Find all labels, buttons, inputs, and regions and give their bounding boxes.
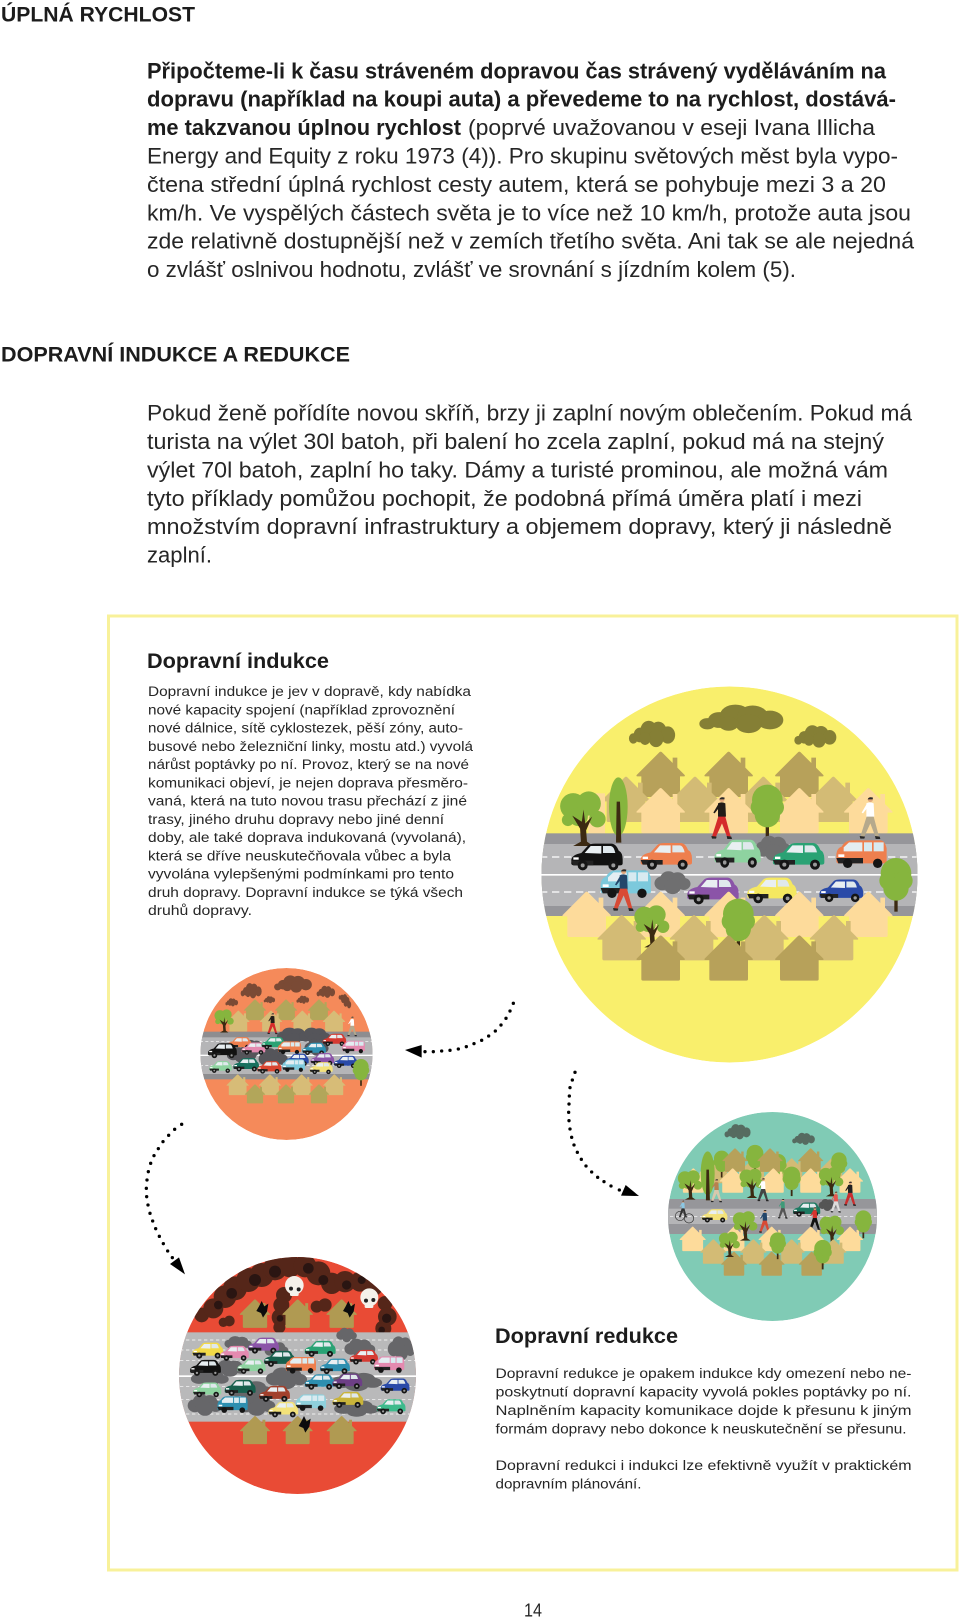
text block: dopravní indukce a redukce: tyto příklady pomůžou pochopit, že podobná přímá úměra platí i mezi (147, 486, 862, 511)
heading: Dopravní indukce a redukce: DOPRAVNÍ INDUKCE A REDUKCE (1, 342, 350, 366)
text block: dopravní indukce a redukce: Pokud ženě pořídíte novou skříň, brzy ji zaplní novým oblečením. Pokud má (147, 401, 913, 426)
text block: dopravní redukce: dopravním plánování. (496, 1476, 642, 1492)
text block: úplná rychlost: o zvlášť oslnivou hodnotu, zvlášť ve srovnání s jízdním kolem (5). (147, 257, 796, 282)
houses below road (240, 1416, 357, 1444)
cars (208, 1034, 365, 1074)
dead birds (256, 1301, 355, 1433)
heading: Dopravní redukce: Dopravní redukce (495, 1324, 678, 1348)
text block: úplná rychlost: (poprvé uvažovanou v eseji Ivana Illicha (468, 115, 876, 140)
houses above road (588, 752, 893, 833)
text block: dopravní indukce: Dopravní indukce je jev v dopravě, kdy nabídka (148, 684, 471, 700)
road (663, 1199, 883, 1234)
text block: úplná rychlost: zde relativně dostupnější než v zemích třetího světa. Ani tak se ale nejedná (147, 229, 915, 254)
clouds (725, 1124, 815, 1145)
trees above road (560, 777, 784, 846)
text block: dopravní indukce: nové kapacity spojení (například zprovoznění (148, 702, 455, 718)
arrow: from yellow to orange circle (405, 1002, 515, 1058)
illustration: orange circle, congested traffic (200, 968, 372, 1140)
text block: dopravní indukce a redukce: turista na výlet 30l batoh, při balení ho zcela zaplní, pokud má na stejný (147, 429, 884, 454)
road (170, 1332, 430, 1422)
text block: úplná rychlost: Připočteme-li k času stráveném dopravou čas strávený vyděláváním na (147, 58, 887, 83)
clouds (629, 705, 836, 748)
text block: dopravní indukce a redukce: výlet 70l batoh, zaplní ho taky. Dámy a turisté prominou, ale možná vám (147, 457, 888, 482)
houses and trees below road (562, 858, 913, 981)
text block: dopravní indukce: vyvolána vylepšenými podmínkami pro tento (148, 866, 454, 882)
text block: dopravní redukce: Dopravní redukci i indukci lze efektivně využít v praktickém (496, 1458, 912, 1474)
heading: Dopravní indukce: Dopravní indukce (147, 649, 329, 673)
text block: dopravní indukce: která se dříve neuskutečňovala vůbec a byla (148, 848, 451, 864)
text block: dopravní indukce a redukce: zaplní. (147, 543, 212, 568)
tree and pedestrians (214, 1009, 357, 1036)
illustration: yellow circle, moderate traffic (533, 686, 927, 1062)
houses and trees above road (680, 1145, 863, 1193)
text block: úplná rychlost: km/h. Ve vyspělých částech světa je to více než 10 km/h, protože auta jsou (147, 200, 911, 225)
text block: dopravní indukce: trasy, jiného druhu dopravy nebo jiné denní (148, 812, 444, 828)
page number: 14 (524, 1600, 542, 1620)
text block: úplná rychlost (147, 58, 915, 282)
cars (190, 1338, 409, 1417)
text block: dopravní indukce: doby, ale také doprava indukovaná (vyvolaná), (148, 830, 466, 846)
smoke (227, 1028, 330, 1069)
text block: dopravní indukce: busové nebo železniční linky, mostu atd.) vyvolá (148, 739, 473, 755)
text block: dopravní indukce a redukce: množstvím dopravní infrastruktury a objemem dopravy, který ji následně (147, 514, 892, 539)
text block: úplná rychlost: Energy and Equity z roku 1973 (4)). Pro skupinu světových měst byla vypo- (147, 144, 898, 168)
text block: dopravní indukce: nárůst poptávky po ní. Provoz, který se na nové (148, 757, 469, 773)
text block: úplná rychlost: me takzvanou úplnou rychlost (147, 115, 462, 140)
text block: dopravní indukce: druh dopravy. Dopravní indukce se týká všech (148, 885, 463, 901)
dark smog arch (194, 1257, 397, 1332)
text block: dopravní redukce: formám dopravy nebo dokonce k neuskutečnění se přesunu. (496, 1422, 906, 1438)
houses below and tree (227, 1059, 369, 1103)
pedestrians (711, 1178, 856, 1233)
text block: dopravní redukce: poskytnutí dopravní kapacity vyvolá pokles poptávky po ní. (496, 1384, 912, 1400)
vehicles (702, 1199, 836, 1222)
road (200, 1032, 372, 1080)
houses (244, 999, 330, 1020)
text block: dopravní redukce (496, 1366, 912, 1492)
text block: dopravní redukce: Dopravní redukce je opakem indukce kdy omezení nebo ne- (496, 1366, 912, 1382)
illustration: teal circle, reduced traffic (663, 1112, 883, 1321)
trees by road (678, 1151, 843, 1200)
smoke (654, 836, 791, 894)
text block: dopravní redukce: Naplněním kapacity komunikace dojde k přesunu k jiným (496, 1403, 912, 1419)
houses and trees below road (680, 1210, 872, 1276)
illustration: red circle, extreme congestion and pollution (170, 1255, 430, 1494)
arrow: from orange to red circle (145, 1123, 185, 1274)
skulls (285, 1276, 378, 1308)
houses above road (240, 1299, 357, 1328)
text block: dopravní indukce: nové dálnice, sítě cyklostezek, pěší zóny, auto- (148, 720, 463, 736)
cyclist (675, 1201, 694, 1223)
arrow: from yellow to teal circle (567, 1071, 639, 1196)
text block: dopravní indukce: komunikaci objeví, je nejen doprava přesměro- (148, 775, 468, 791)
heading: Úplná rychlost: ÚPLNÁ RYCHLOST (1, 2, 195, 26)
panel: dopravní indukce a redukce (108, 616, 957, 1570)
text block: úplná rychlost: čtena střední úplná rychlost cesty autem, která se pohybuje mezi 3 a 20 (147, 172, 886, 197)
text block: dopravní indukce: vaná, která na tuto novou trasu přechází z jiné (148, 794, 467, 810)
text block: dopravní indukce: druhů dopravy. (148, 903, 252, 919)
cars (571, 840, 887, 904)
smoke on road (188, 1328, 415, 1417)
pedestrians above road (711, 797, 880, 839)
brown clouds (225, 975, 353, 1011)
text block: dopravní indukce (148, 684, 473, 919)
road (533, 833, 927, 916)
text block: dopravní indukce a redukce (147, 401, 913, 568)
text block: úplná rychlost: dopravu (například na koupi auta) a převedeme to na rychlost, dostává- (147, 87, 896, 112)
